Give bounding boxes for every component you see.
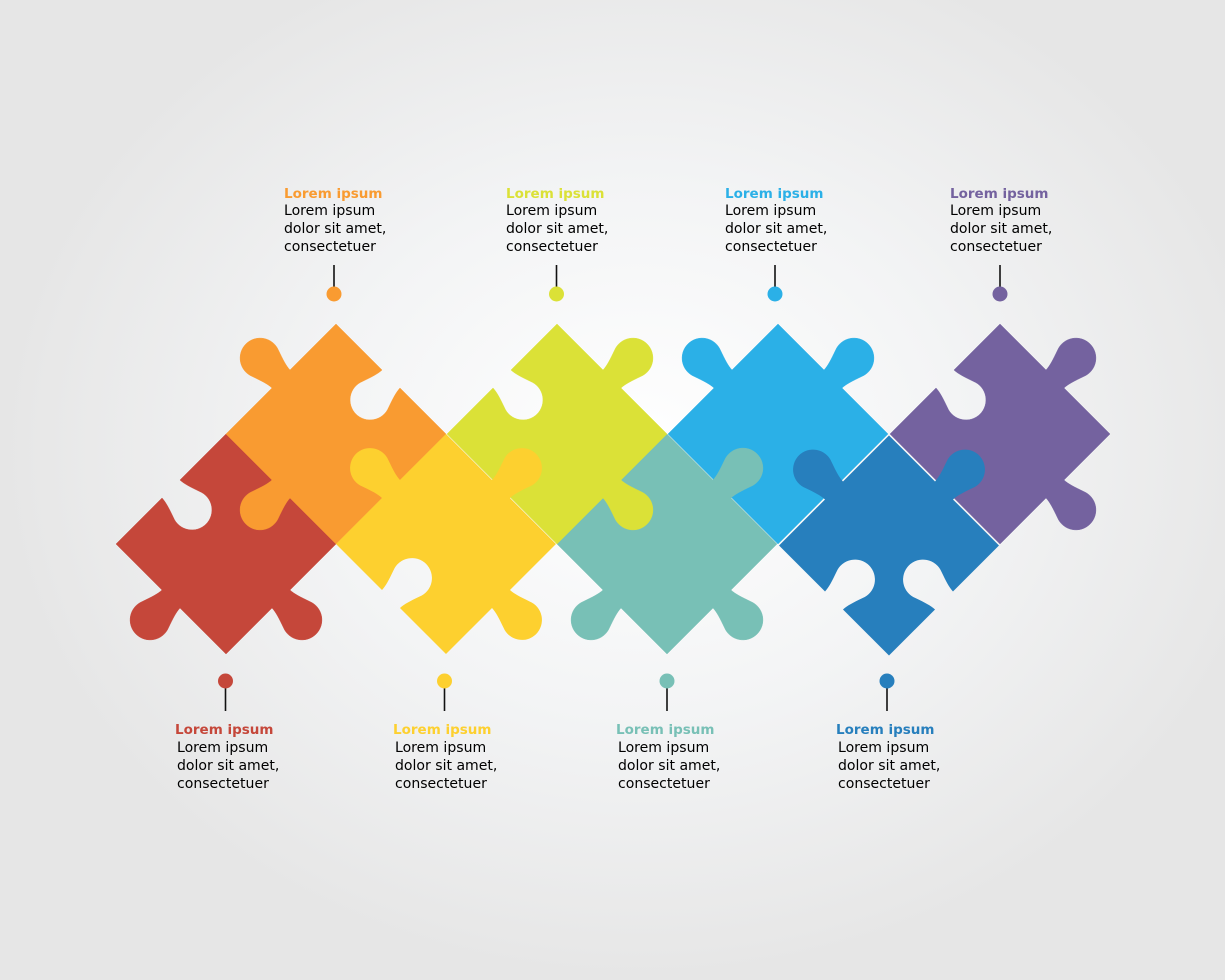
puzzle piece: red — [81, 434, 371, 724]
lime body text: dolor sit amet, — [506, 221, 608, 237]
dark blue body text: dolor sit amet, — [838, 758, 940, 774]
yellow pin — [437, 674, 452, 711]
puzzle piece: purple — [890, 289, 1180, 579]
dark blue body text: consectetuer — [838, 776, 930, 792]
teal heading: Lorem ipsum — [616, 722, 714, 738]
dark blue pin — [880, 674, 894, 711]
lime heading: Lorem ipsum — [506, 186, 604, 202]
callout: lime — [506, 186, 608, 302]
dark blue body text: Lorem ipsum — [838, 740, 929, 756]
callout: orange — [284, 186, 386, 302]
yellow heading: Lorem ipsum — [393, 722, 491, 738]
puzzle: connected chain of eight pieces — [81, 254, 1180, 724]
puzzle piece: teal — [522, 399, 847, 724]
dark blue heading: Lorem ipsum — [836, 722, 934, 738]
orange body text: dolor sit amet, — [284, 221, 386, 237]
blue pin — [768, 265, 782, 302]
orange pin — [326, 265, 342, 302]
yellow body text: consectetuer — [395, 776, 487, 792]
yellow body text: Lorem ipsum — [395, 740, 486, 756]
callout: purple — [950, 186, 1052, 302]
teal body text: dolor sit amet, — [618, 758, 720, 774]
blue body text: consectetuer — [725, 239, 817, 255]
callout: dark blue — [836, 674, 940, 792]
lime body text: consectetuer — [506, 239, 598, 255]
callout: teal — [616, 674, 720, 792]
purple body text: Lorem ipsum — [950, 203, 1041, 219]
red pin — [218, 674, 233, 711]
red body text: consectetuer — [177, 776, 269, 792]
puzzle piece: dark blue — [744, 365, 1034, 655]
puzzle piece: lime — [447, 289, 737, 579]
purple pin — [992, 265, 1008, 302]
callout: red — [175, 674, 279, 792]
callout: yellow — [393, 674, 497, 792]
orange heading: Lorem ipsum — [284, 186, 382, 202]
orange body text: consectetuer — [284, 239, 376, 255]
purple heading: Lorem ipsum — [950, 186, 1048, 202]
lime body text: Lorem ipsum — [506, 203, 597, 219]
purple body text: consectetuer — [950, 239, 1042, 255]
orange body text: Lorem ipsum — [284, 203, 375, 219]
red body text: Lorem ipsum — [177, 740, 268, 756]
blue body text: Lorem ipsum — [725, 203, 816, 219]
red heading: Lorem ipsum — [175, 722, 273, 738]
lime pin — [549, 265, 564, 302]
teal body text: consectetuer — [618, 776, 710, 792]
callout: blue — [725, 186, 827, 302]
teal body text: Lorem ipsum — [618, 740, 709, 756]
puzzle piece: yellow — [301, 364, 626, 689]
blue heading: Lorem ipsum — [725, 186, 823, 202]
red body text: dolor sit amet, — [177, 758, 279, 774]
blue body text: dolor sit amet, — [725, 221, 827, 237]
teal pin — [660, 674, 674, 711]
puzzle piece: blue — [633, 254, 923, 544]
puzzle piece: orange — [156, 289, 446, 579]
purple body text: dolor sit amet, — [950, 221, 1052, 237]
yellow body text: dolor sit amet, — [395, 758, 497, 774]
